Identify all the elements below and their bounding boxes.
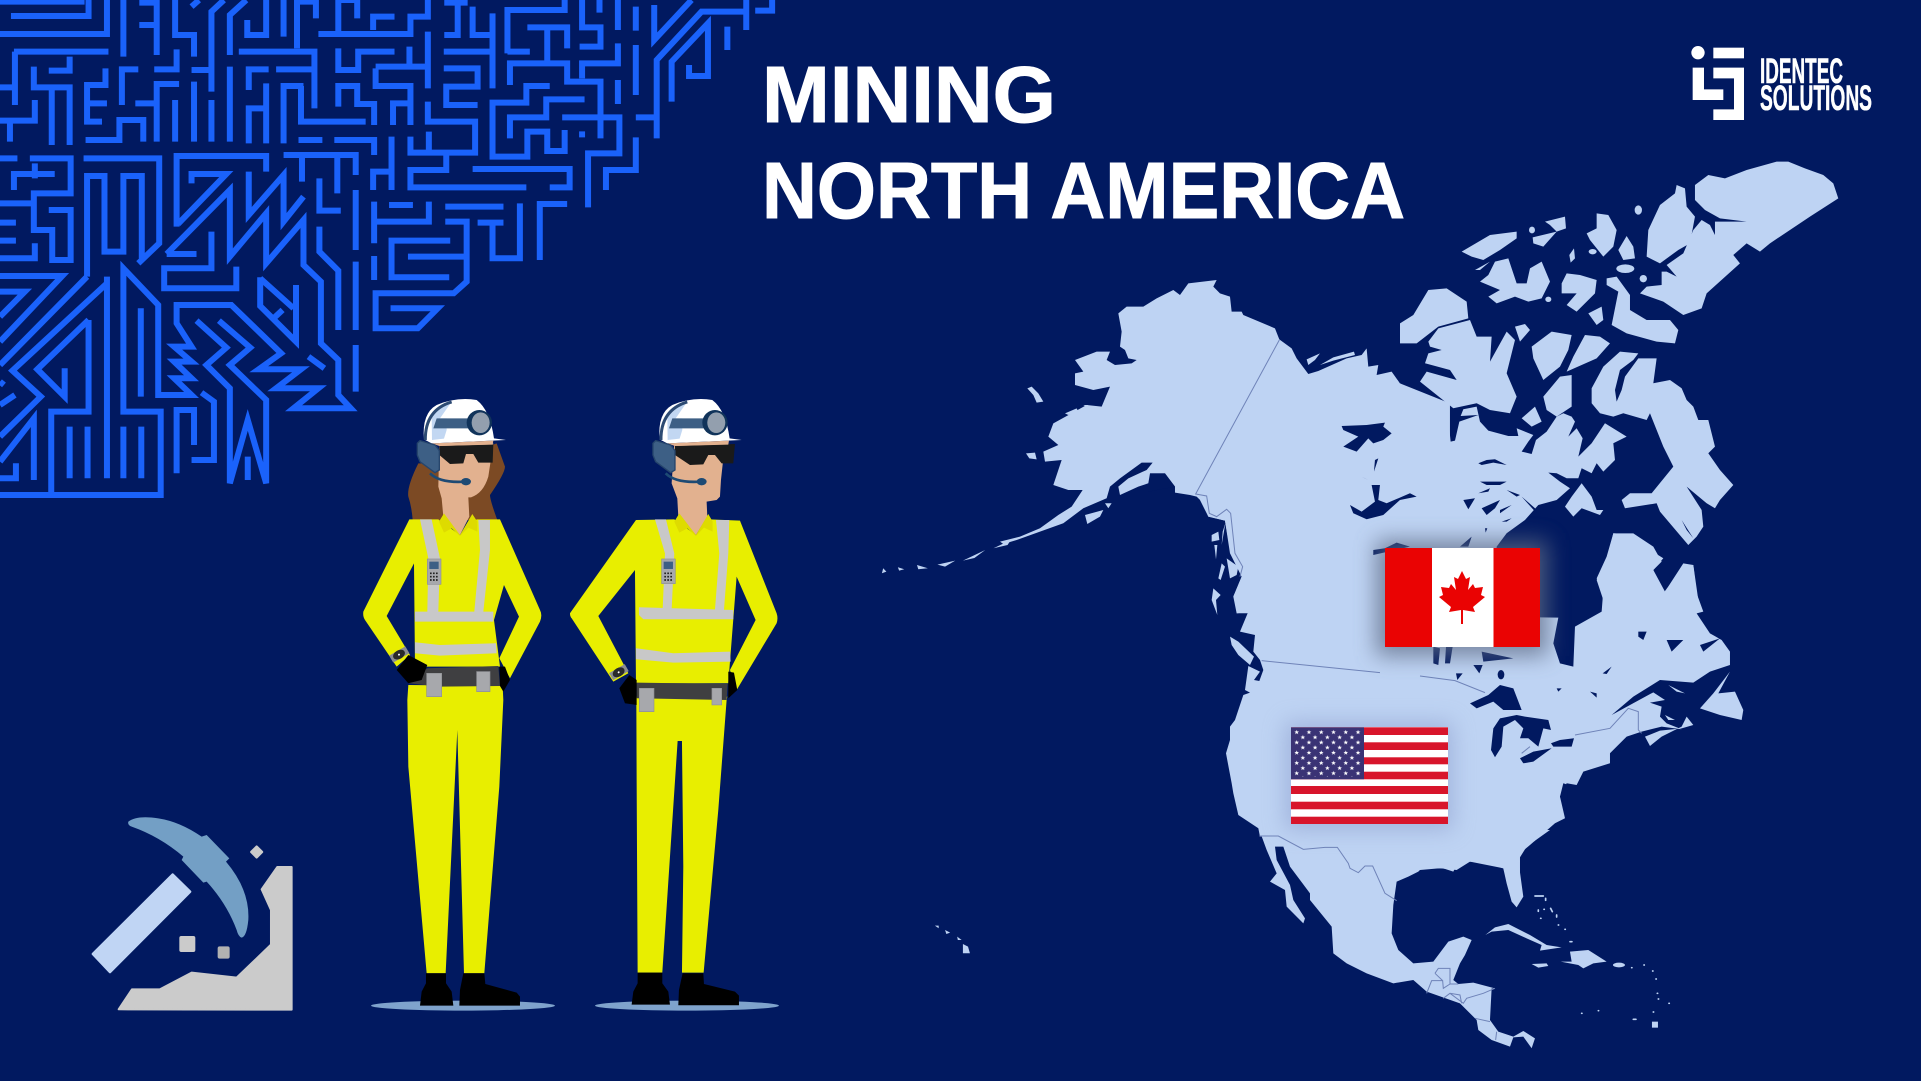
jacket <box>363 519 541 678</box>
land: Hawaii <box>935 926 970 953</box>
reflective stripes <box>415 519 497 656</box>
title <box>762 50 1405 235</box>
lakes: northwest <box>1148 423 1417 555</box>
land: Mexico and Central America <box>1259 830 1669 1048</box>
lakes: northern Canada <box>1460 459 1693 547</box>
flag: United States <box>1285 722 1453 830</box>
collar <box>439 513 477 536</box>
logo mark <box>1691 46 1744 120</box>
land: Alaska and western Canada <box>1000 280 1450 613</box>
boots <box>632 973 739 1005</box>
radio device <box>662 559 675 584</box>
logo: Identec Solutions <box>1691 46 1872 120</box>
collar <box>674 513 713 536</box>
helmet <box>424 399 506 443</box>
rock <box>119 867 292 1010</box>
belt <box>637 683 728 700</box>
tool pouches <box>427 672 490 697</box>
headset <box>417 441 439 473</box>
wrist tag <box>389 646 410 663</box>
small Caribbean islands <box>1535 896 1669 1019</box>
handle <box>93 875 190 972</box>
title: NORTH AMERICA <box>762 146 1405 235</box>
ground shadow <box>371 1001 555 1011</box>
jacket <box>570 519 777 690</box>
face and neck <box>438 443 493 535</box>
hair <box>408 443 505 520</box>
boots <box>420 973 520 1006</box>
radio device <box>427 559 441 584</box>
circuit maze pattern <box>0 0 772 495</box>
trousers <box>407 685 503 973</box>
land: eastern USA, Quebec and Atlantic Canada <box>1420 533 1743 880</box>
tool pouches <box>639 688 722 712</box>
map: North America <box>882 162 1838 1048</box>
safety glasses <box>675 444 735 465</box>
logo text: IDENTEC <box>1760 52 1843 91</box>
worker: man <box>570 399 779 1011</box>
headlamp <box>467 410 492 435</box>
flag: Canada <box>1376 540 1548 656</box>
safety glasses <box>439 444 493 464</box>
trousers <box>636 697 727 973</box>
pick head <box>128 817 248 938</box>
land: Arctic archipelago and northern Canada <box>1400 162 1838 600</box>
title: MINING <box>762 50 1056 139</box>
wrist tag <box>609 664 629 680</box>
land: Aleutian islands <box>882 540 1011 573</box>
worker: woman <box>363 399 555 1011</box>
ground shadow <box>595 1001 779 1011</box>
land: western USA and Canadian prairies <box>1200 500 1480 837</box>
rock chips <box>179 936 195 952</box>
helmet <box>659 399 742 446</box>
face and neck <box>672 443 725 535</box>
icon: pickaxe and rock <box>93 817 292 1010</box>
belt <box>408 666 500 687</box>
logo text <box>1760 52 1872 118</box>
gloves <box>397 655 510 692</box>
maple leaf <box>1439 571 1485 624</box>
headset <box>653 441 707 485</box>
gloves <box>619 672 737 705</box>
country borders <box>1196 340 1642 1040</box>
reflective stripes <box>636 519 733 663</box>
lakes: Great Lakes and Quebec <box>1433 632 1720 810</box>
